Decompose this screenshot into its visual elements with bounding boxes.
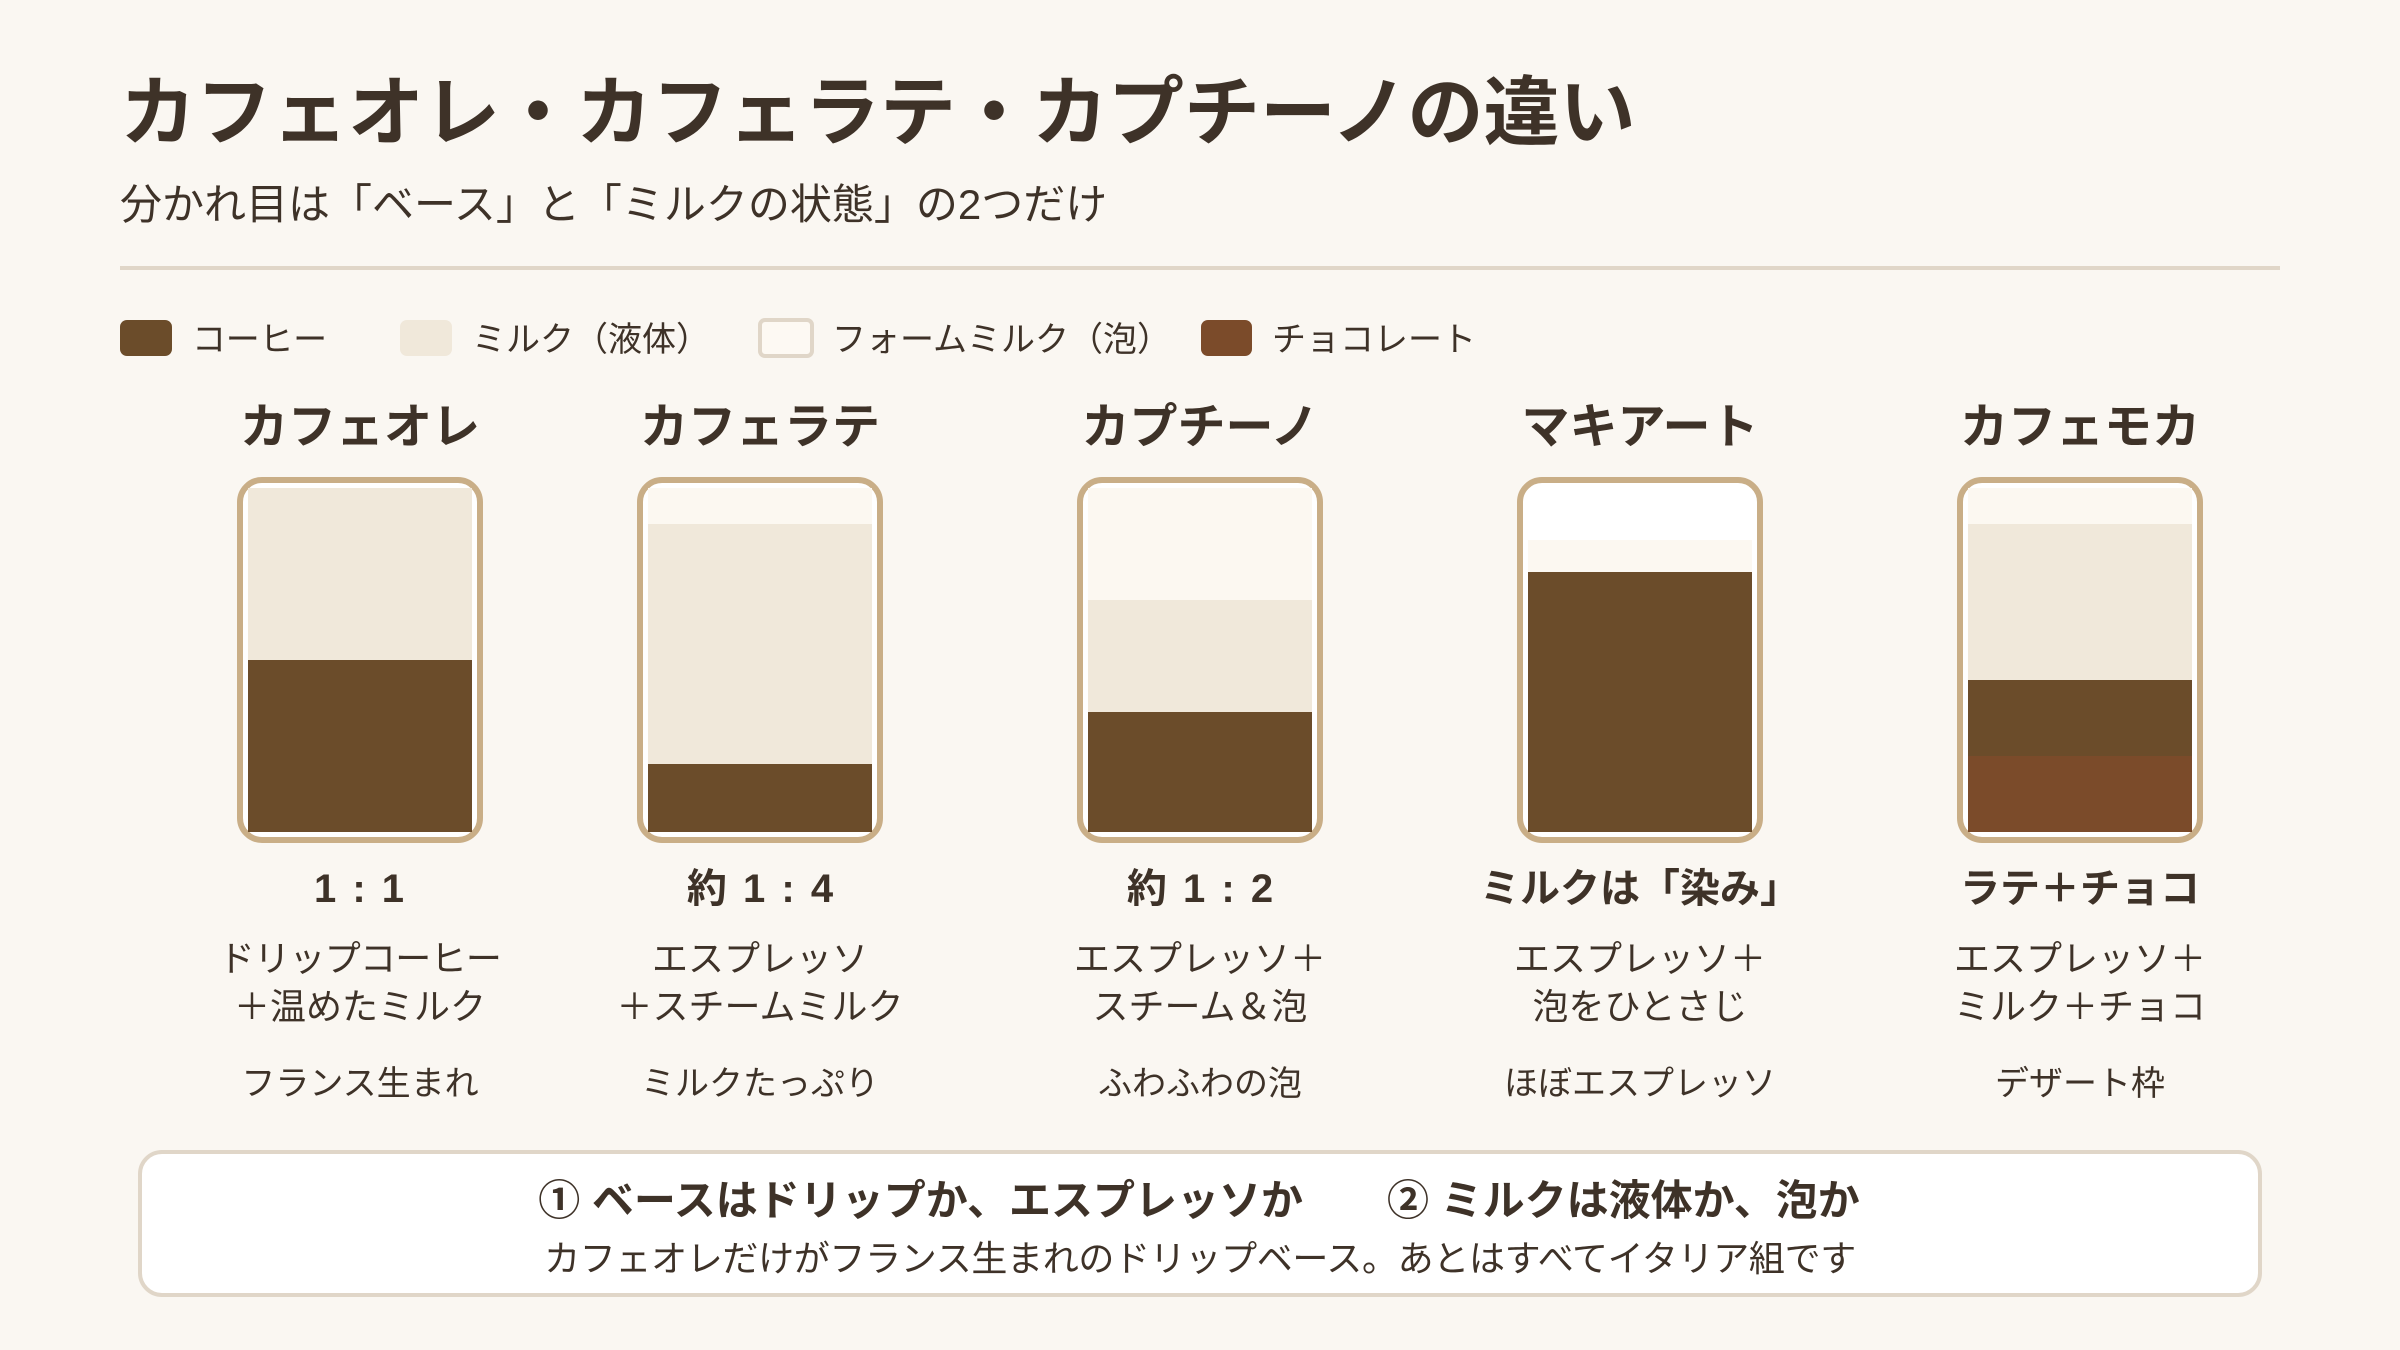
tagline: ミルクたっぷり (641, 1065, 879, 1103)
title: カフェオレ・カフェラテ・カプチーノの違い (120, 71, 1635, 156)
legend (120, 318, 1476, 359)
description: ミルク＋チョコ (1954, 986, 2206, 1027)
subtitle: 分かれ目は「ベース」と「ミルクの状態」の2つだけ (120, 181, 1107, 228)
legend swatch: milk (400, 320, 452, 356)
column: cafe mocha (1954, 401, 2206, 1103)
description: エスプレッソ＋ (1954, 938, 2206, 979)
legend label: chocolate: チョコレート (1272, 321, 1476, 359)
tagline: ふわふわの泡 (1098, 1065, 1302, 1103)
column: cappuccino (1074, 401, 1326, 1103)
ratio: 約 1 : 2 (1127, 867, 1273, 911)
callout (138, 1150, 2262, 1297)
description (1954, 938, 2206, 1027)
tagline: デザート枠 (1995, 1065, 2165, 1103)
description: 泡をひとさじ (1533, 986, 1747, 1027)
description: エスプレッソ＋ (1514, 938, 1766, 979)
description: ドリップコーヒー (219, 938, 501, 979)
cup diagram (1517, 477, 1763, 843)
description (1514, 938, 1766, 1027)
cup diagram (237, 477, 483, 843)
legend swatch: chocolate (1201, 320, 1252, 356)
legend label: milk: ミルク（液体） (472, 321, 710, 359)
drink name: カフェラテ (640, 401, 880, 454)
ratio: ミルクは「染み」 (1480, 867, 1800, 911)
column: cafe latte (617, 401, 903, 1103)
description: ＋温めたミルク (234, 986, 486, 1027)
legend swatch: foam (758, 318, 814, 358)
drink name: カプチーノ (1081, 401, 1319, 454)
description (219, 938, 501, 1027)
description: エスプレッソ (652, 938, 868, 979)
legend label: foam: フォームミルク（泡） (832, 321, 1171, 359)
drink name: カフェモカ (1960, 401, 2200, 454)
callout text: カフェオレだけがフランス生まれのドリップベース。あとはすべてイタリア組です (544, 1238, 1856, 1279)
drink name: マキアート (1521, 401, 1759, 454)
column: cafe au lait (219, 401, 501, 1103)
cup diagram (1077, 477, 1323, 843)
callout heading: ① ベースはドリップか、エスプレッソか ② ミルクは液体か、泡か (538, 1177, 1860, 1224)
description (617, 938, 903, 1027)
description: スチーム＆泡 (1093, 986, 1307, 1027)
description (1074, 938, 1326, 1027)
cup diagram (637, 477, 883, 843)
drink name: カフェオレ (240, 401, 480, 454)
ratio: 1 : 1 (314, 867, 404, 911)
description: ＋スチームミルク (617, 986, 903, 1027)
ratio: ラテ＋チョコ (1960, 867, 2200, 911)
legend label: coffee: コーヒー (192, 321, 327, 359)
legend swatch: coffee (120, 320, 172, 356)
description: エスプレッソ＋ (1074, 938, 1326, 979)
column: macchiato (1480, 401, 1800, 1103)
tagline: ほぼエスプレッソ (1504, 1065, 1776, 1103)
ratio: 約 1 : 4 (687, 867, 833, 911)
tagline: フランス生まれ (241, 1065, 479, 1103)
cup diagram (1957, 477, 2203, 843)
